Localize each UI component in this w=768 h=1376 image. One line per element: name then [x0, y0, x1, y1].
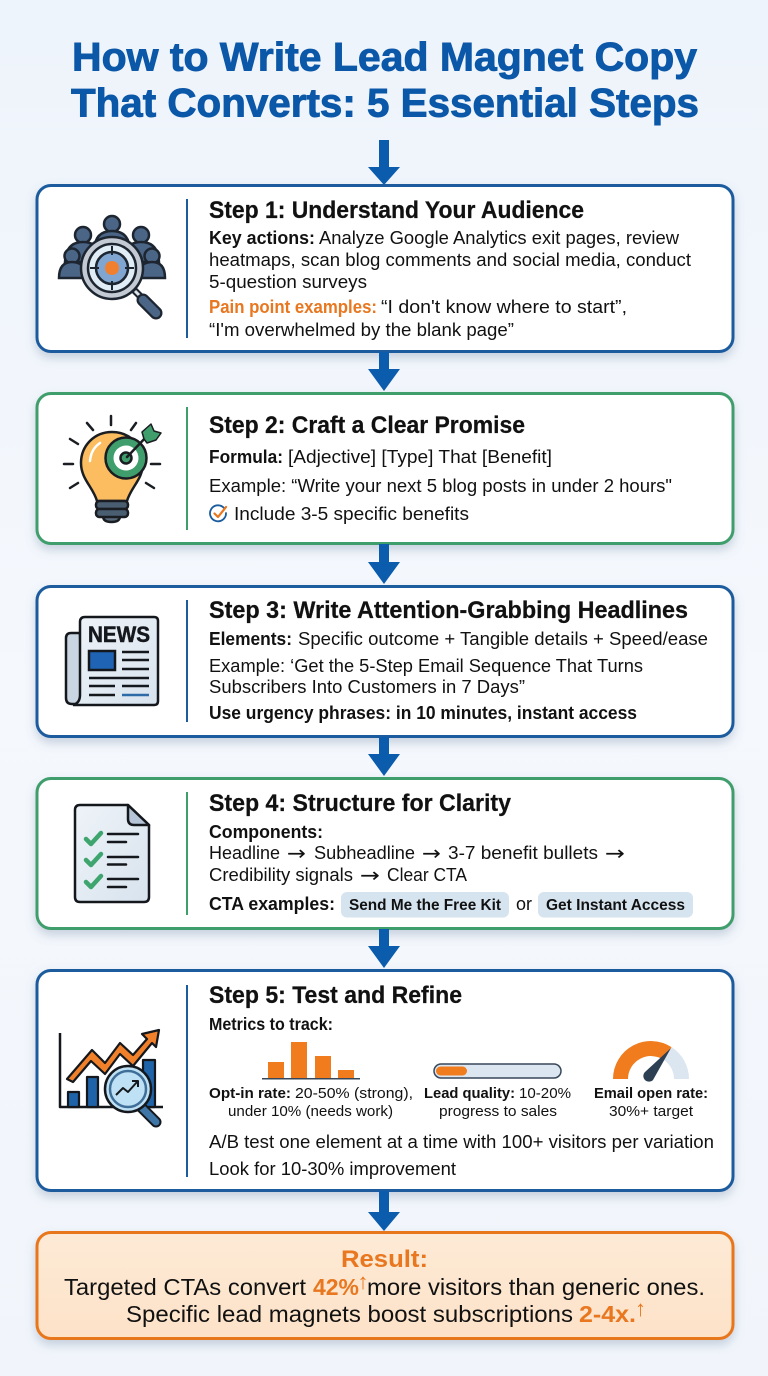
metric: lead quality: Lead quality: — [424, 1085, 515, 1102]
metric: email open rate: Email open rate: — [594, 1085, 708, 1102]
text: A/B test: A/B test one element at a time with 100+ visitors per variation — [209, 1131, 714, 1152]
metric: lead quality — [424, 1064, 571, 1120]
icon: light bulb with target — [64, 416, 161, 522]
button: send me the free kit: Send Me the Free Kit — [349, 897, 501, 914]
text: urgency: Use urgency phrases: in 10 minutes, instant access — [209, 702, 637, 723]
text: CTA examples: CTA examples: — [209, 893, 335, 914]
title: That Converts: 5 Essential Steps — [71, 82, 699, 126]
panel: step 1 — [37, 186, 733, 352]
gauge — [620, 1048, 682, 1082]
arrow: step 2 to step 3 — [368, 544, 400, 584]
arrow: step 4 to step 5 — [368, 929, 400, 968]
text: targeted CTAs: ↑ — [358, 1269, 368, 1294]
text: components: Components: — [209, 821, 323, 842]
text: pain points: “I don't know where to start”, — [381, 296, 627, 317]
text: formula: [Adjective] [Type] That [Benefit] — [288, 446, 552, 467]
heading: Step 1: Understand Your Audience — [209, 197, 584, 224]
text: components: Headline — [209, 842, 280, 863]
text: components: → — [422, 841, 441, 865]
text: key actions: Key actions: — [209, 227, 315, 248]
text: metrics label: Metrics to track: — [209, 1014, 333, 1034]
progress bar — [434, 1064, 561, 1078]
text: example: Subscribers Into Customers in 7 Days” — [209, 676, 525, 697]
text: key actions: 5-question surveys — [209, 271, 367, 292]
text: specific lead magnets: Specific lead magnets boost subscriptions — [126, 1301, 573, 1327]
text: components: Clear CTA — [387, 864, 468, 885]
text: key actions: Analyze Google Analytics exit pages, review — [319, 227, 680, 248]
metric: email open rate — [594, 1048, 708, 1120]
heading: Step 4: Structure for Clarity — [209, 790, 511, 817]
text: pain points: Pain point examples: — [209, 296, 377, 317]
icon: audience magnifier — [59, 216, 165, 313]
heading: Result: — [341, 1246, 428, 1273]
text: components: → — [360, 863, 380, 887]
metric: opt-in rate — [209, 1042, 413, 1120]
heading: Step 2: Craft a Clear Promise — [209, 412, 525, 439]
text: improvement: Look for 10-30% improvement — [209, 1158, 456, 1179]
text: components — [209, 821, 625, 887]
text: formula: Formula: — [209, 446, 283, 467]
button: get instant access: Get Instant Access — [546, 897, 685, 914]
text: targeted CTAs — [64, 1269, 705, 1300]
text: elements: Specific outcome + Tangible details + Speed/ease — [298, 628, 708, 649]
icon: newspaper: NEWS — [88, 622, 150, 647]
metric: opt-in rate: under 10% (needs work) — [228, 1103, 393, 1120]
text: targeted CTAs: 42% — [313, 1274, 359, 1300]
arrow: step 1 to step 2 — [368, 352, 400, 391]
title: How to Write Lead Magnet Copy — [72, 36, 698, 80]
heading: Step 5: Test and Refine — [209, 982, 462, 1009]
panel: step 2 — [37, 394, 733, 544]
metric: lead quality: 10-20% — [519, 1085, 571, 1102]
text: targeted CTAs: Targeted CTAs convert — [64, 1274, 307, 1300]
metric: opt-in rate: 20-50% (strong), — [295, 1085, 413, 1102]
panel: step 4 — [37, 778, 733, 928]
text: example: Example: ‘Get the 5-Step Email Sequence That Turns — [209, 655, 643, 676]
text: specific lead magnets — [126, 1296, 646, 1327]
metric: email open rate: 30%+ target — [609, 1103, 694, 1120]
icon: growth chart with magnifier — [60, 1030, 163, 1122]
text: key actions: heatmaps, scan blog comments and social media, conduct — [209, 249, 691, 270]
text: elements: Elements: — [209, 628, 292, 649]
icon: newspaper — [66, 617, 158, 705]
icon: checklist document — [75, 805, 149, 902]
text: components: → — [605, 841, 625, 865]
metric: lead quality: progress to sales — [439, 1103, 557, 1120]
text: example — [209, 655, 643, 697]
text: specific lead magnets: 2-4x. — [579, 1301, 636, 1327]
arrow: step 5 to result — [368, 1191, 400, 1231]
text: pain points — [209, 296, 627, 340]
metric: opt-in rate: Opt-in rate: — [209, 1085, 291, 1102]
title — [71, 36, 699, 126]
text: pain points: “I'm overwhelmed by the blank page” — [209, 319, 514, 340]
icon: check circle — [210, 505, 226, 521]
button: send me the free kit — [341, 892, 509, 918]
panel: step 3 — [37, 586, 733, 736]
arrow: title to step 1 — [368, 140, 400, 185]
panel: result — [37, 1232, 733, 1338]
text: key actions — [209, 227, 691, 292]
text: CTA examples: or — [516, 893, 532, 914]
text: benefits: Include 3-5 specific benefits — [234, 503, 469, 524]
text: components: → — [287, 841, 306, 865]
text: components: Subheadline — [314, 842, 415, 863]
arrow: step 3 to step 4 — [368, 737, 400, 776]
button: get instant access — [538, 892, 693, 918]
text: example: Example: “Write your next 5 blog posts in under 2 hours" — [209, 475, 672, 496]
text: CTA examples — [209, 892, 693, 918]
text: components: 3-7 benefit bullets — [448, 842, 598, 863]
text: specific lead magnets: ↑ — [635, 1296, 646, 1321]
text: components: Credibility signals — [209, 864, 353, 885]
text: targeted CTAs: more visitors than generic ones. — [367, 1274, 705, 1300]
bar chart — [262, 1042, 360, 1080]
panel: step 5 — [37, 970, 733, 1190]
heading: Step 3: Write Attention-Grabbing Headlines — [209, 597, 688, 624]
